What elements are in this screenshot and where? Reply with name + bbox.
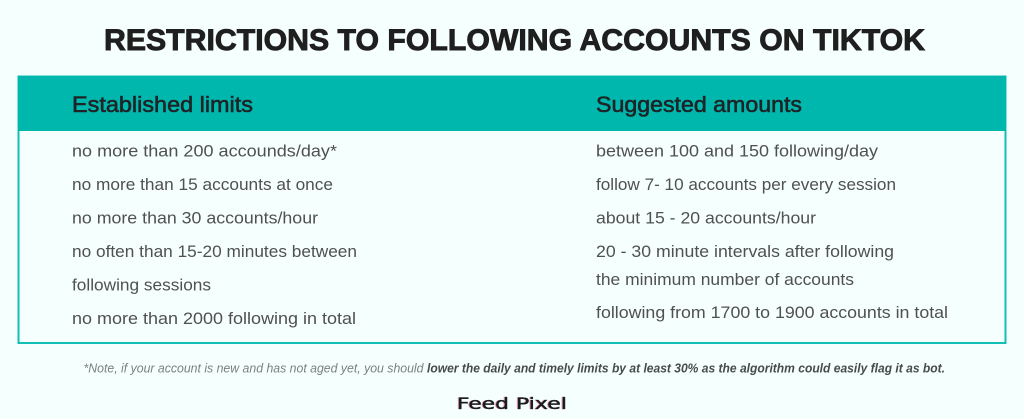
table border [18,76,1006,343]
logo: Feed Pixel: Pixel [516,394,567,413]
column: established limits: no more than 200 accounds/day* [72,142,337,160]
column: suggested amounts: following from 1700 to 1900 accounts in total [596,303,948,322]
footnote: *Note, if your account is new and has not aged yet, you should [84,362,425,376]
title: RESTRICTIONS TO FOLLOWING ACCOUNTS ON TIKTOK [104,24,925,57]
column: established limits: following sessions [72,276,211,294]
column: established limits: no more than 15 accounts at once [72,175,333,194]
column: suggested amounts: about 15 - 20 accounts/hour [596,208,816,228]
logo: Feed Pixel: Feed [457,394,509,413]
logo: Feed Pixel [457,394,567,413]
column: suggested amounts: the minimum number of accounts [596,270,854,289]
heading: suggested amounts: Suggested amounts [596,92,802,117]
column: established limits: no more than 2000 following in total [72,309,356,328]
column: established limits: no often than 15-20 minutes between [72,242,357,261]
column: suggested amounts: between 100 and 150 following/day [596,142,879,160]
footnote: lower the daily and timely limits by at least 30% as the algorithm could easily flag it as bot. [427,362,945,376]
heading: established limits: Established limits [72,92,253,117]
table header band [18,76,1006,131]
column: suggested amounts [596,142,948,322]
column: suggested amounts: 20 - 30 minute intervals after following [596,242,894,261]
column: established limits: no more than 30 accounts/hour [72,208,318,228]
footnote [84,362,945,376]
panel: limits table [18,76,1006,343]
column: suggested amounts: follow 7- 10 accounts per every session [596,175,896,194]
column: established limits [72,142,357,328]
